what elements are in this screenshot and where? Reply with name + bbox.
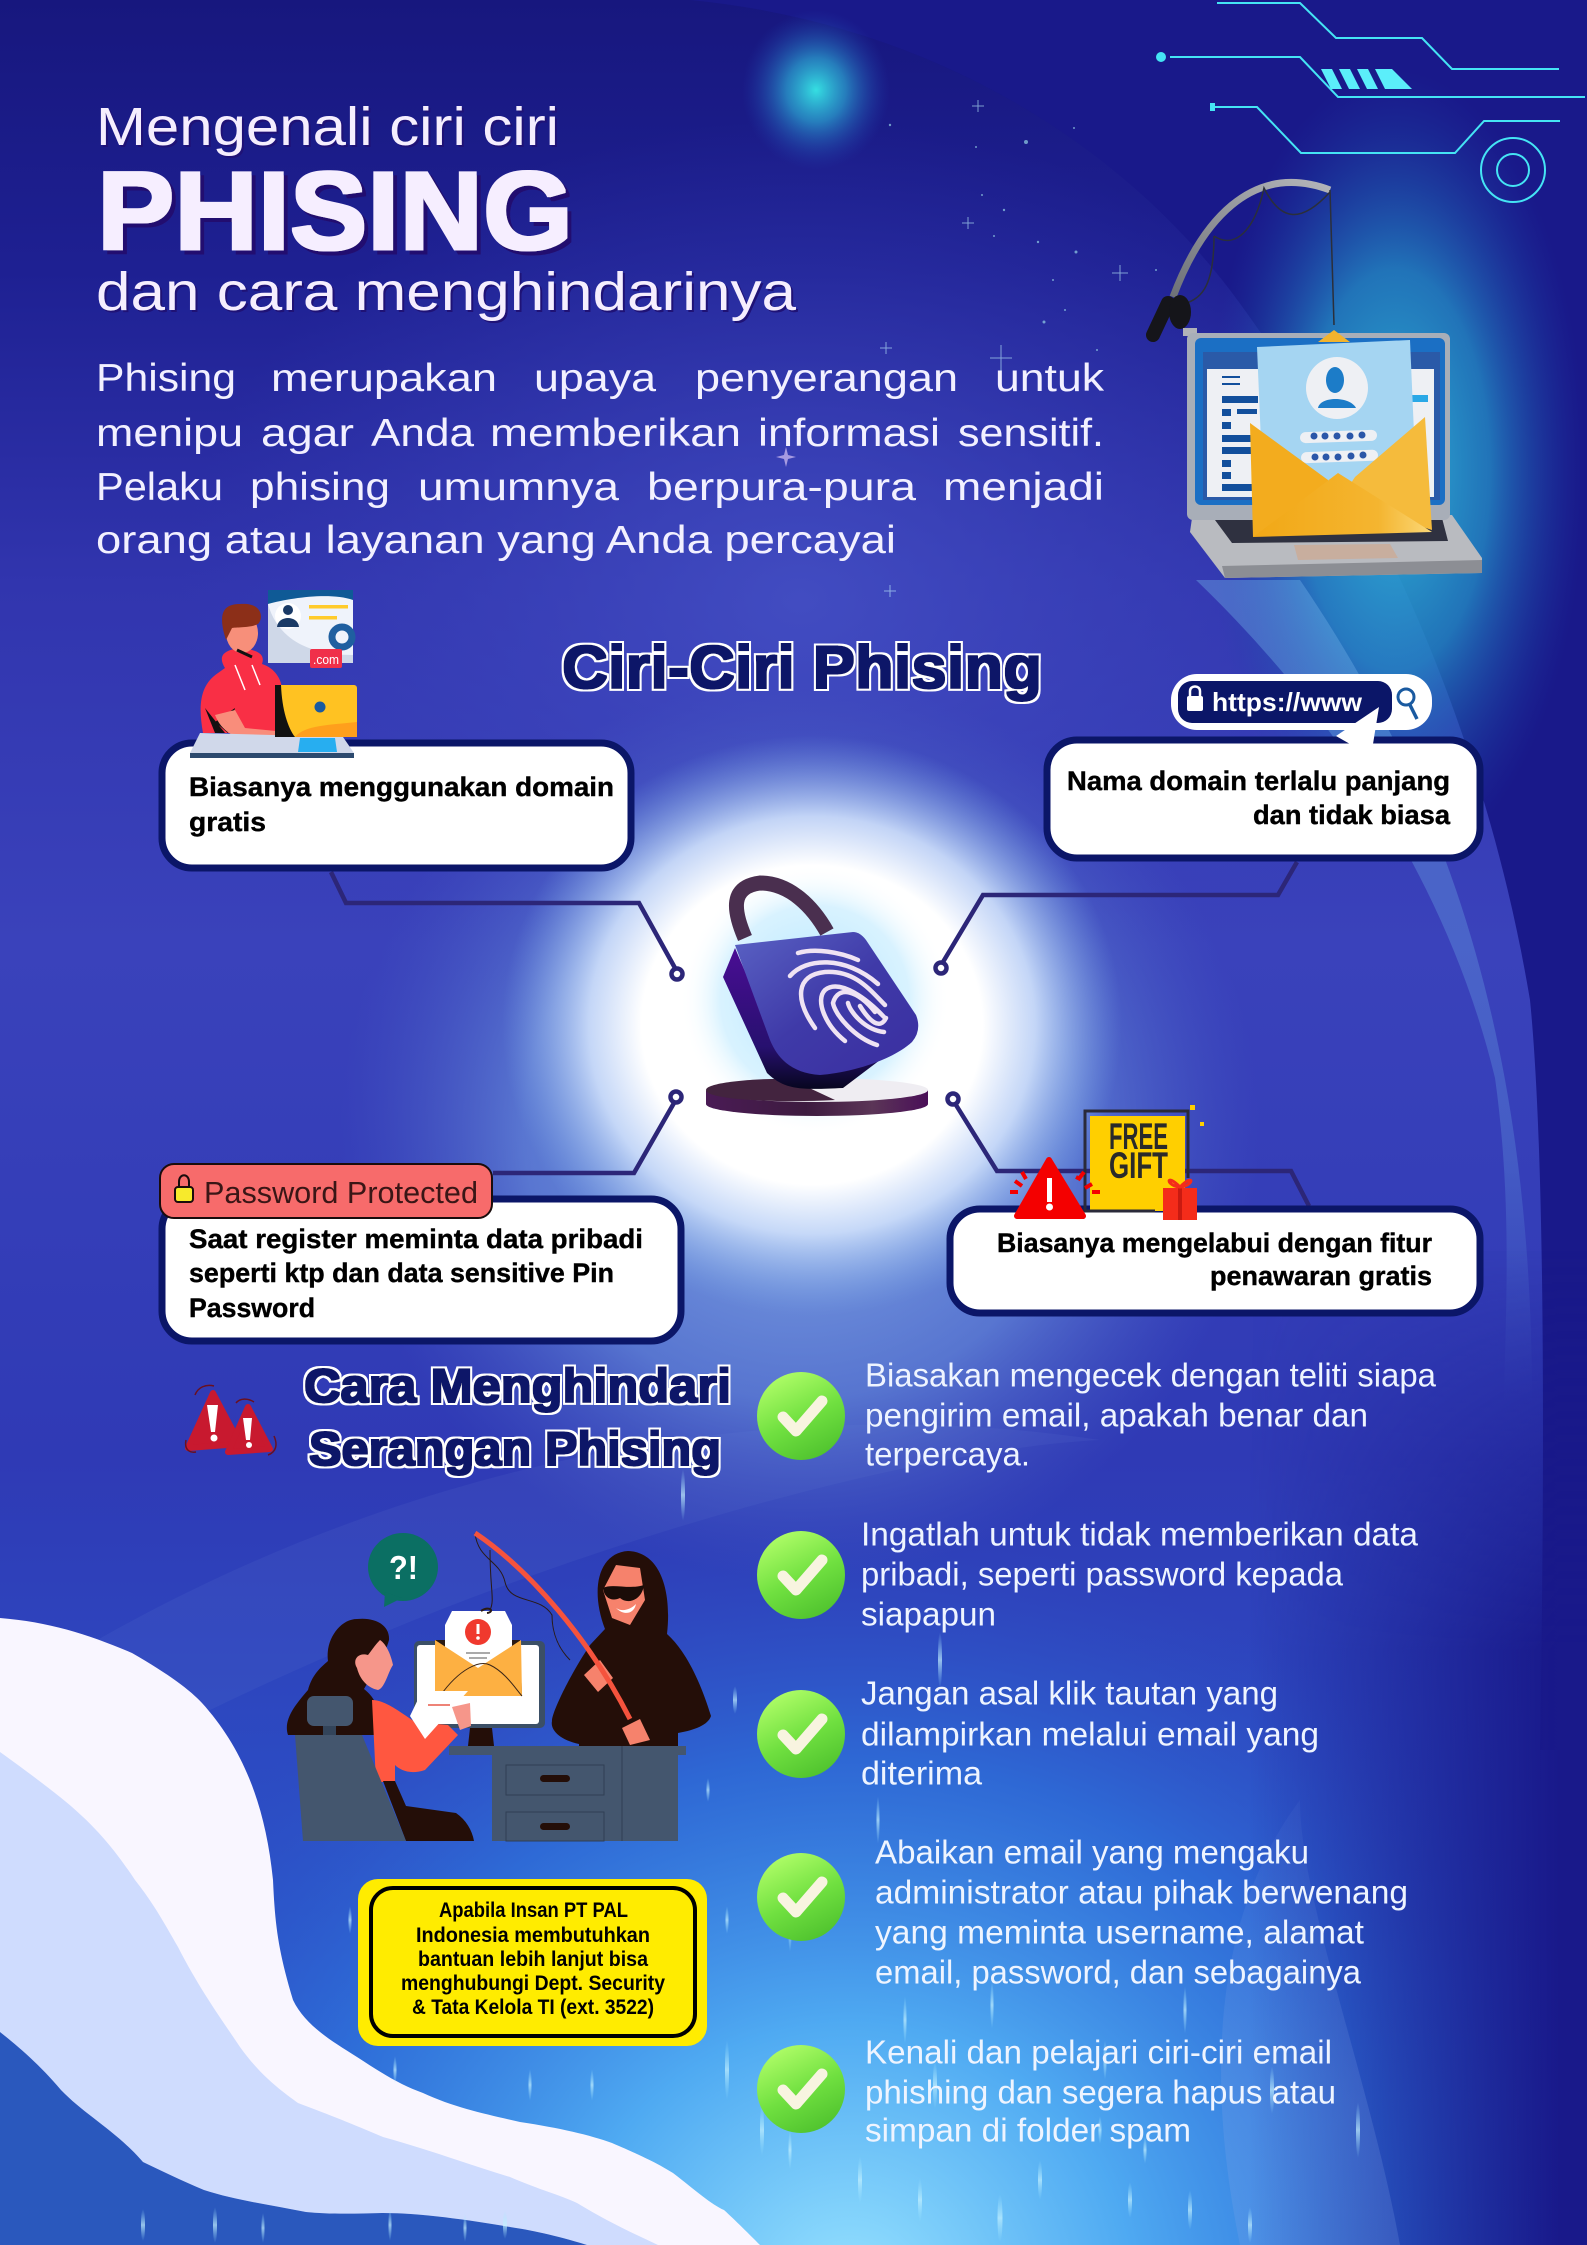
panel: nama domain: dan tidak biasa — [1253, 800, 1451, 830]
tip 3: Jangan asal klik tautan yang — [861, 1674, 1278, 1712]
icon: https address bar — [1171, 674, 1432, 744]
panel: penawaran gratis — [950, 1209, 1480, 1313]
woman — [287, 1619, 389, 1735]
panel: data pribadi: Saat register meminta data pribadi — [189, 1224, 643, 1254]
intro paragraph: menjadi — [943, 466, 1104, 509]
hacker — [552, 1551, 711, 1746]
icon: free gift with warning: GIFT — [1109, 1145, 1168, 1186]
heading: Cara Menghindari — [304, 1359, 731, 1475]
chair — [307, 1696, 353, 1726]
tip 4: Abaikan email yang mengaku — [875, 1834, 1309, 1870]
panel: data pribadi: Password — [189, 1293, 315, 1323]
heading: Cara Menghindari: Serangan Phising — [309, 1422, 721, 1475]
illustration: hacker phishing woman at desk — [287, 1533, 711, 1841]
icon: speech bubble: ?! — [389, 1549, 418, 1586]
panel: data pribadi: seperti ktp dan data sensitive Pin — [189, 1258, 614, 1288]
panel: penawaran gratis: penawaran gratis — [1210, 1261, 1432, 1291]
tip 1 — [757, 1356, 1437, 1472]
icon: man at computer with .com window — [190, 590, 357, 758]
intro paragraph: umumnya — [418, 466, 619, 509]
icon: speech bubble — [368, 1533, 438, 1607]
tip 4 — [757, 1834, 1408, 1990]
title: PHISING — [97, 150, 573, 273]
icon: fingerprint padlock — [706, 883, 928, 1116]
intro paragraph: memberikan — [490, 412, 741, 455]
callout: contact info — [358, 1879, 707, 2046]
checklist: avoidance tips — [757, 1356, 1437, 2148]
intro paragraph: berpura-pura — [647, 466, 916, 509]
tip 3: dilampirkan melalui email yang — [861, 1716, 1319, 1752]
panel: nama domain — [1047, 740, 1480, 858]
title: Mengenali ciri ciri — [96, 97, 559, 157]
stars — [776, 100, 1157, 597]
tip 4: yang meminta username, alamat — [875, 1914, 1364, 1950]
panel: domain gratis: Biasanya menggunakan domain — [189, 772, 614, 802]
intro paragraph: upaya — [534, 357, 656, 400]
icon: free gift with warning — [1010, 1105, 1204, 1220]
intro paragraph — [96, 357, 1105, 562]
title: dan cara menghindarinya — [96, 262, 797, 322]
callout: contact info: & Tata Kelola TI (ext. 3522) — [412, 1996, 654, 2019]
intro paragraph: Phising — [96, 357, 236, 400]
tip 2: Ingatlah untuk tidak memberikan data — [861, 1516, 1419, 1552]
callout: contact info: bantuan lebih lanjut bisa — [418, 1948, 648, 1971]
tip 5: Kenali dan pelajari ciri-ciri email — [865, 2034, 1332, 2070]
centre glow — [340, 680, 1260, 1580]
decorative circuit lines — [1157, 3, 1585, 202]
white wave — [0, 1618, 760, 2245]
tip 3 — [757, 1674, 1319, 1792]
badge: password protected: Password Protected — [204, 1175, 478, 1210]
connector lines — [331, 862, 1309, 1206]
heading: Ciri-Ciri Phising: Ciri-Ciri Phising — [562, 634, 1042, 701]
tip 1: terpercaya. — [865, 1436, 1030, 1472]
intro paragraph: agar — [261, 412, 354, 455]
intro paragraph: menipu — [96, 412, 243, 455]
icon: https address bar: https://www — [1212, 687, 1363, 717]
callout: contact info: Indonesia membutuhkan — [416, 1924, 650, 1947]
tip 2: siapapun — [861, 1596, 996, 1632]
intro paragraph: penyerangan — [695, 357, 958, 400]
tip 1: pengirim email, apakah benar dan — [865, 1396, 1368, 1434]
panel: domain gratis: gratis — [189, 807, 266, 837]
desk — [449, 1746, 686, 1755]
icon: warning triangles — [186, 1385, 276, 1455]
badge: password protected — [160, 1164, 492, 1218]
callout: contact info: menghubungi Dept. Security — [401, 1972, 665, 1995]
decorative rain — [141, 1469, 1360, 2243]
tip 2: pribadi, seperti password kepada — [861, 1556, 1344, 1592]
intro paragraph: informasi — [758, 412, 940, 455]
tip 2 — [757, 1516, 1419, 1632]
panel: domain gratis — [162, 743, 631, 868]
tip 5: phishing dan segera hapus atau — [865, 2074, 1336, 2110]
intro paragraph: merupakan — [271, 357, 497, 400]
intro paragraph: Pelaku — [96, 466, 223, 509]
tip 4: administrator atau pihak berwenang — [875, 1874, 1408, 1910]
intro paragraph: orang atau layanan yang Anda percayai — [96, 519, 896, 562]
icon: phishing laptop with rod and envelope — [1153, 183, 1482, 578]
tip 4: email, password, dan sebagainya — [875, 1954, 1362, 1990]
callout: contact info: Apabila Insan PT PAL — [439, 1899, 628, 1922]
intro paragraph: sensitif. — [958, 412, 1104, 455]
heading: Cara Menghindari: Cara Menghindari — [304, 1359, 731, 1412]
tip 5: simpan di folder spam — [865, 2112, 1191, 2148]
panel: nama domain: Nama domain terlalu panjang — [1067, 766, 1450, 796]
intro paragraph: phising — [250, 466, 390, 509]
icon: man at computer with .com window: .com — [313, 652, 339, 667]
panel: penawaran gratis: Biasanya mengelabui dengan fitur — [997, 1228, 1432, 1258]
tip 3: diterima — [861, 1754, 983, 1792]
tip 1: Biasakan mengecek dengan teliti siapa — [865, 1356, 1437, 1394]
icon: free gift with warning: FREE — [1109, 1116, 1168, 1157]
intro paragraph: untuk — [995, 357, 1105, 400]
intro paragraph: Anda — [371, 412, 474, 455]
panel: data pribadi — [162, 1199, 681, 1341]
tip 5 — [757, 2034, 1336, 2148]
title — [96, 97, 797, 322]
